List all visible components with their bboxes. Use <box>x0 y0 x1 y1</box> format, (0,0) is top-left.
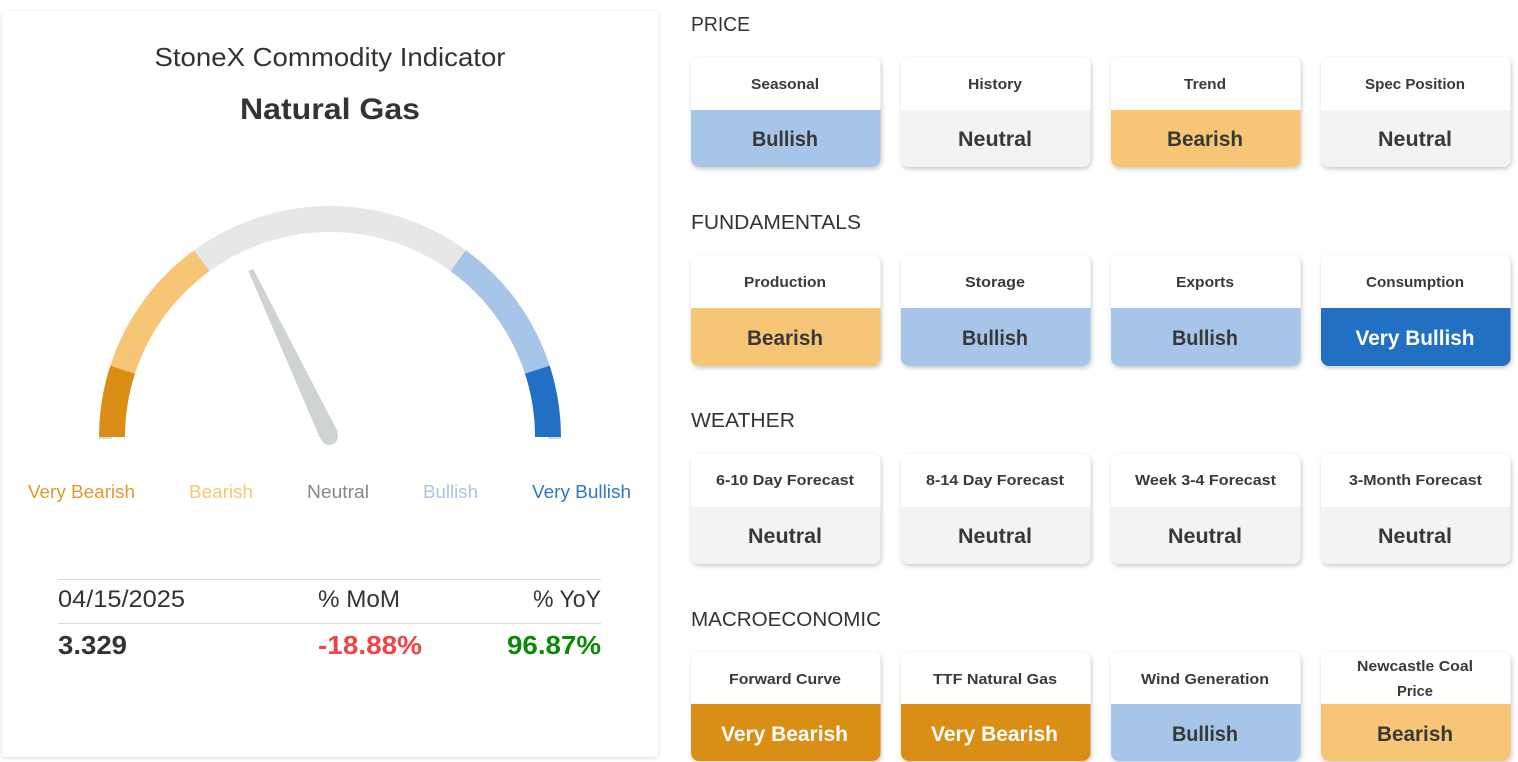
card: seasonal <box>691 57 880 167</box>
gauge legend: Bearish <box>189 482 253 502</box>
gauge chart <box>99 206 561 445</box>
card: exports <box>1111 255 1300 366</box>
card: ttf natural gas: Very Bearish <box>931 723 1058 746</box>
card: storage: Bullish <box>962 327 1028 350</box>
card: seasonal: Seasonal <box>751 76 819 93</box>
gauge legend: Very Bearish <box>28 482 135 502</box>
card: forward curve: Forward Curve <box>729 671 841 688</box>
card: spec position: Spec Position <box>1365 76 1465 93</box>
price statistics table: % YoY <box>533 586 601 613</box>
card: spec position <box>1321 57 1510 167</box>
card: newcastle coal price <box>1321 652 1510 761</box>
card: 3-month forecast: Neutral <box>1378 525 1452 548</box>
gauge legend: Very Bullish <box>532 482 631 502</box>
card: 8-14 day forecast <box>901 454 1090 564</box>
card: ttf natural gas: TTF Natural Gas <box>933 671 1057 688</box>
card: consumption <box>1321 255 1510 366</box>
card: ttf natural gas <box>901 652 1090 761</box>
card: week 3-4 forecast: Neutral <box>1168 525 1242 548</box>
card: week 3-4 forecast <box>1111 454 1300 564</box>
card: production: Bearish <box>747 327 823 350</box>
card: storage <box>901 255 1090 366</box>
heading: price: PRICE <box>691 14 750 36</box>
card: newcastle coal price: Bearish <box>1377 723 1453 746</box>
card: wind generation: Wind Generation <box>1141 671 1269 688</box>
gauge legend <box>28 482 631 502</box>
card: production <box>691 255 880 366</box>
heading: fundamentals: FUNDAMENTALS <box>691 212 861 234</box>
card: 6-10 day forecast: Neutral <box>748 525 822 548</box>
card: history <box>901 57 1090 167</box>
price statistics table: -18.88% <box>318 630 422 660</box>
card: trend <box>1111 57 1300 167</box>
card: forward curve <box>691 652 880 761</box>
card: 3-month forecast: 3-Month Forecast <box>1349 472 1482 489</box>
card: 6-10 day forecast <box>691 454 880 564</box>
card: newcastle coal price: Newcastle Coal <box>1357 658 1473 675</box>
title: StoneX Commodity Indicator <box>154 42 506 72</box>
card: 8-14 day forecast: 8-14 Day Forecast <box>926 472 1064 489</box>
card: storage: Storage <box>965 274 1025 291</box>
card: 6-10 day forecast: 6-10 Day Forecast <box>716 472 854 489</box>
card: 8-14 day forecast: Neutral <box>958 525 1032 548</box>
card: consumption: Very Bullish <box>1356 327 1474 350</box>
commodity name heading: Natural Gas <box>240 93 420 126</box>
card: week 3-4 forecast: Week 3-4 Forecast <box>1135 472 1276 489</box>
panel: commodity indicator gauge <box>2 11 658 757</box>
card: trend: Bearish <box>1167 128 1243 151</box>
card: spec position: Neutral <box>1378 128 1452 151</box>
card: 3-month forecast <box>1321 454 1510 564</box>
card: seasonal: Bullish <box>752 128 818 151</box>
card: production: Production <box>744 274 826 291</box>
gauge legend: Neutral <box>307 482 369 502</box>
gauge needle <box>248 269 338 445</box>
card: history: Neutral <box>958 128 1032 151</box>
card: newcastle coal price: Price <box>1397 683 1433 700</box>
card: exports: Exports <box>1176 274 1234 291</box>
card: wind generation <box>1111 652 1300 761</box>
card: trend: Trend <box>1184 76 1226 93</box>
card: exports: Bullish <box>1172 327 1238 350</box>
price statistics table: % MoM <box>318 586 400 613</box>
price statistics table: 3.329 <box>58 630 127 660</box>
card: wind generation: Bullish <box>1172 723 1238 746</box>
price statistics table: 04/15/2025 <box>58 586 185 613</box>
heading: macroeconomic: MACROECONOMIC <box>691 609 881 631</box>
gauge legend: Bullish <box>423 482 478 502</box>
price statistics table: 96.87% <box>507 630 601 660</box>
card: consumption: Consumption <box>1366 274 1464 291</box>
heading: weather: WEATHER <box>691 410 795 432</box>
card: forward curve: Very Bearish <box>721 723 848 746</box>
card: history: History <box>968 76 1023 93</box>
price statistics table <box>58 579 601 660</box>
